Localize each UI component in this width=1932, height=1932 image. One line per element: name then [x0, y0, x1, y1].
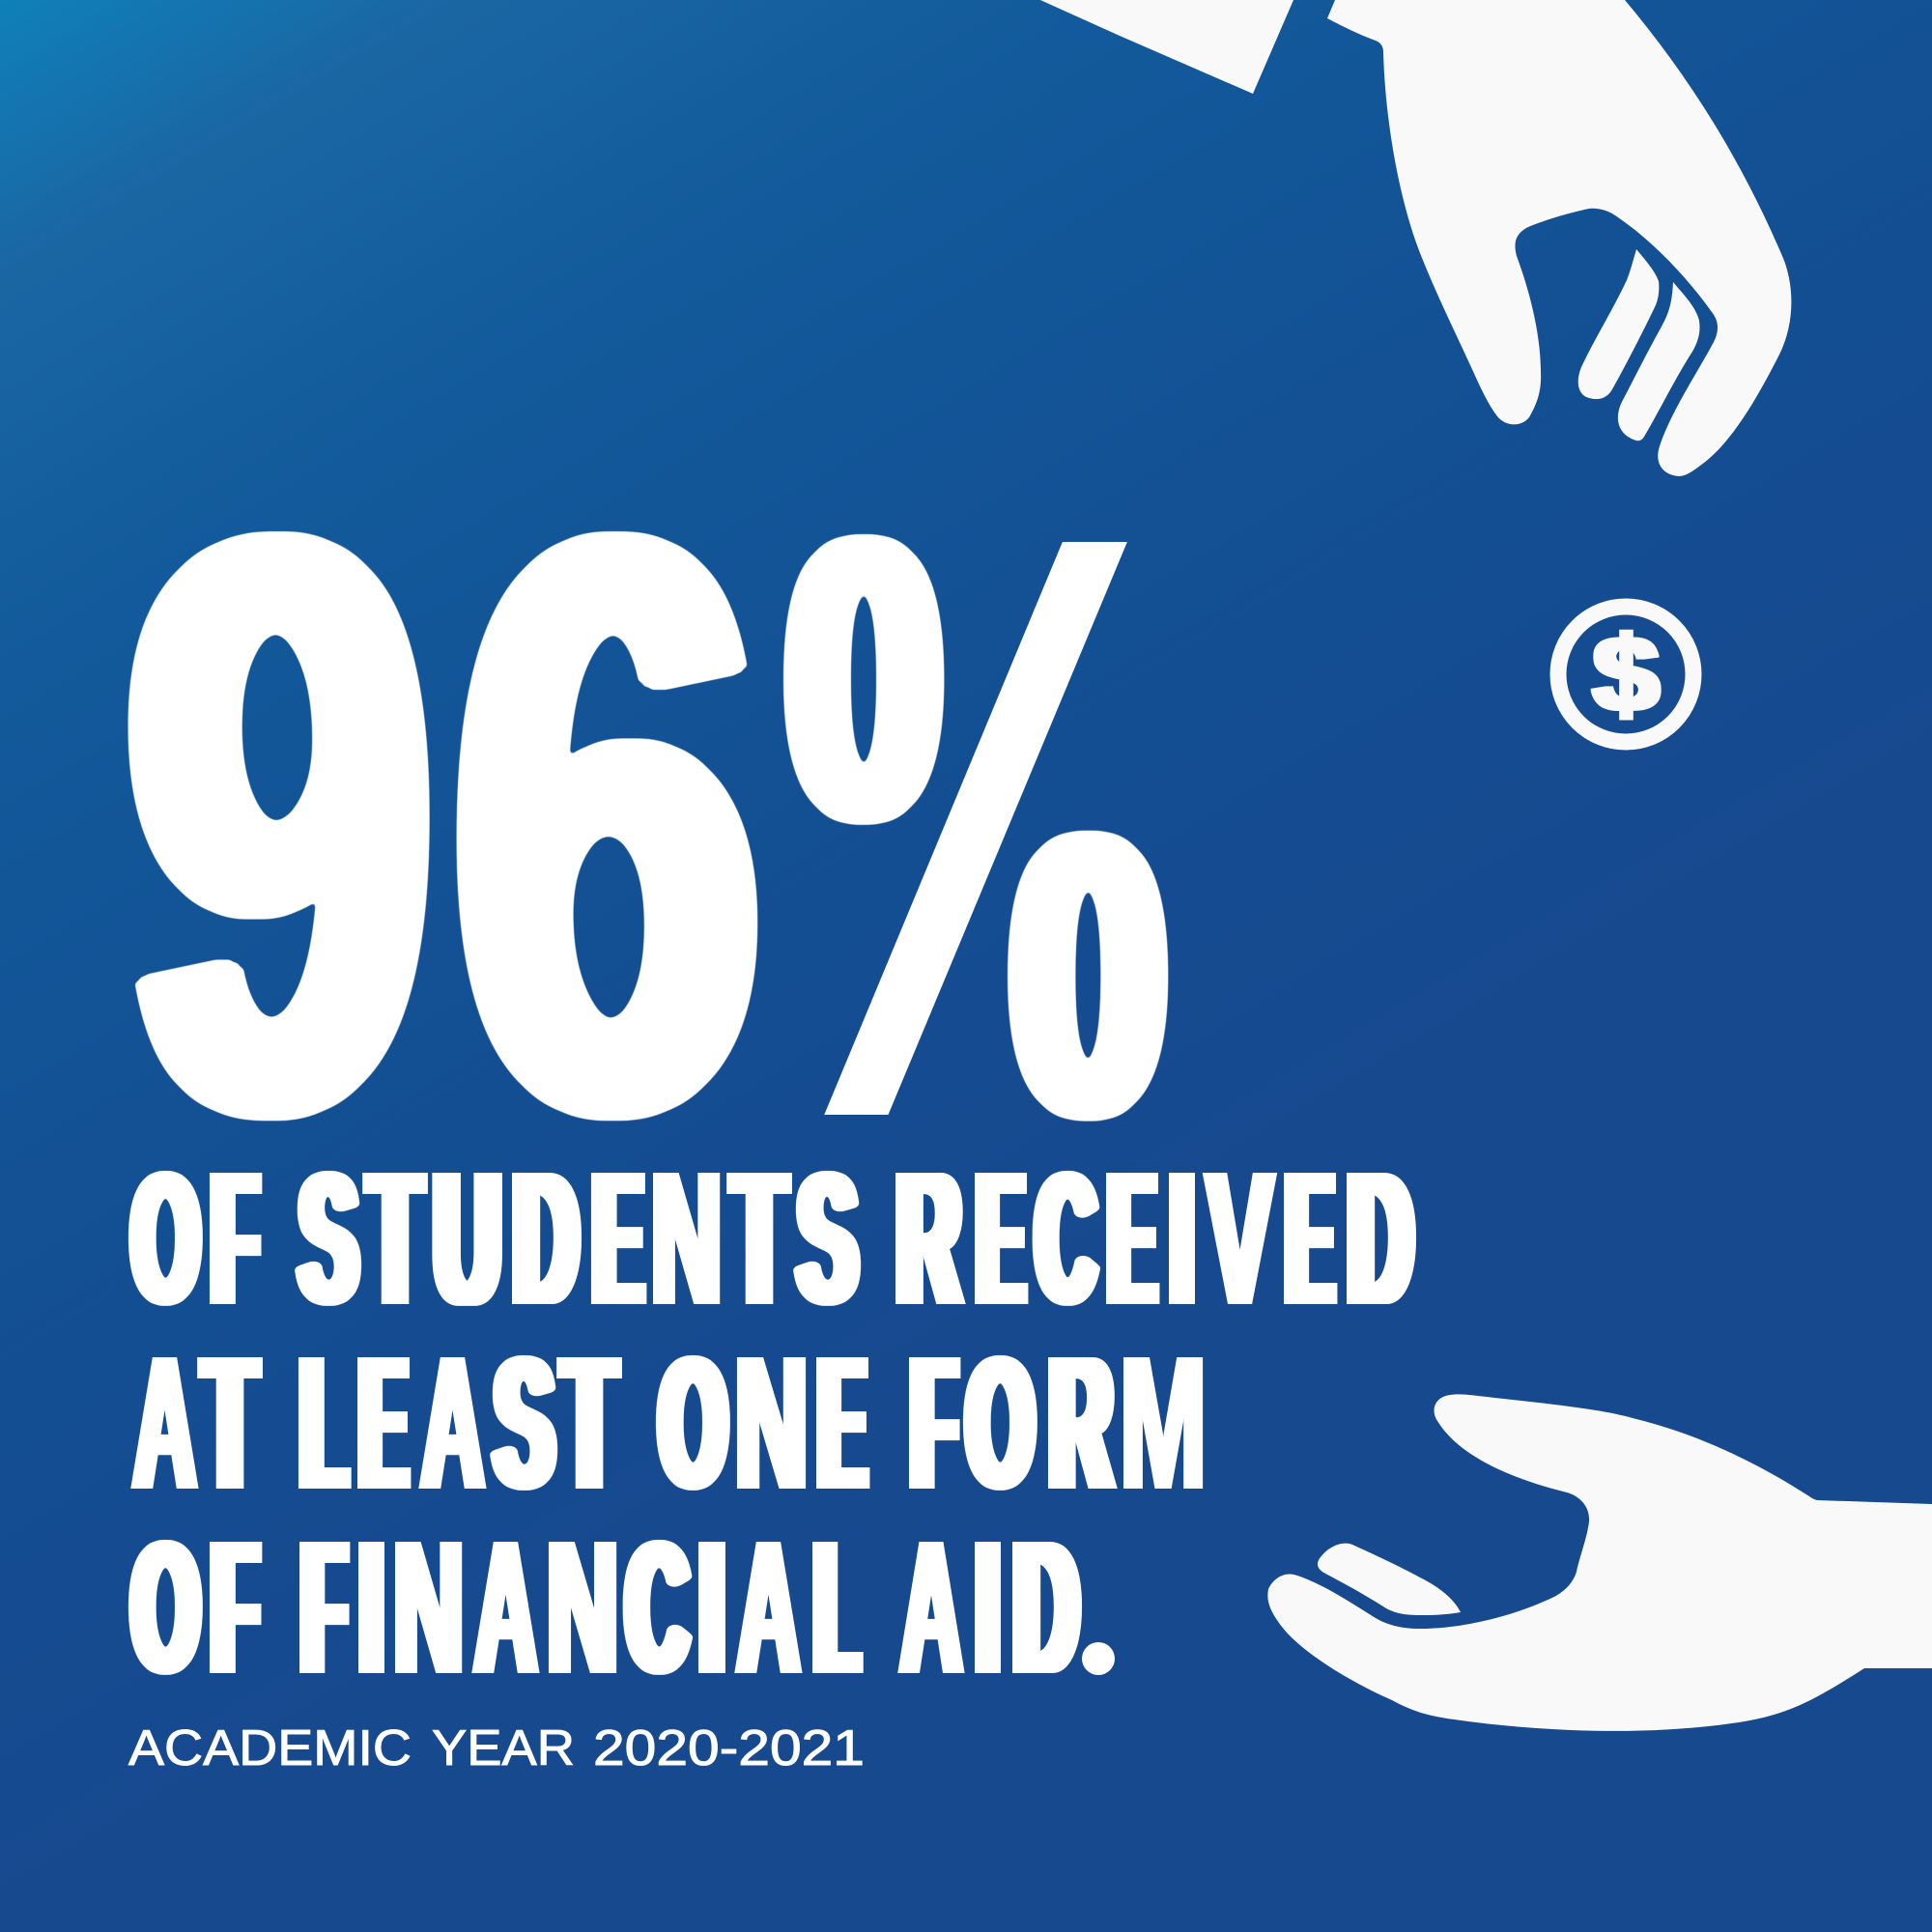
headline line 1: E: [978, 1133, 1023, 1346]
headline line 2: E: [360, 1318, 406, 1530]
headline line 3: O: [132, 1507, 199, 1710]
headline line 1: R: [897, 1131, 960, 1346]
headline line 2: T: [204, 1318, 256, 1530]
headline period: .: [1092, 1581, 1119, 1690]
headline line 2: T: [563, 1318, 615, 1530]
headline line 2: S: [495, 1321, 554, 1525]
headline line 1: D: [514, 1132, 578, 1345]
headline line 1: E: [1287, 1133, 1332, 1346]
headline line 1: V: [1207, 1132, 1273, 1346]
headline line 1: S: [798, 1137, 857, 1341]
headline line 1: D: [1349, 1132, 1412, 1345]
big statistic: percent sign: %: [740, 362, 1211, 1293]
headline line 3: I: [361, 1500, 382, 1714]
big statistic: percent sign: %: [821, 532, 1165, 1248]
headline line 1: T: [733, 1133, 785, 1346]
headline line 3: D: [1014, 1501, 1078, 1714]
headline line 2: N: [735, 1317, 808, 1530]
headline line 2: M: [1120, 1317, 1207, 1529]
headline line 3: C: [627, 1506, 688, 1710]
headline line 2: A: [133, 1316, 196, 1529]
big statistic: 96: [128, 373, 758, 1278]
headline line 3: A: [737, 1500, 800, 1714]
headline line 3: F: [213, 1499, 257, 1714]
big statistic: 96: 9: [128, 373, 431, 1278]
headline line 2: R: [1050, 1317, 1112, 1530]
headline line 3: [132, 1499, 1078, 1715]
headline line 3: L: [815, 1499, 858, 1715]
icon: lower open hand: [1267, 1394, 1932, 1731]
caption: academic year: ACADEMIC: [128, 1720, 412, 1776]
headline line 1: I: [1172, 1131, 1192, 1345]
headline line 1: N: [651, 1132, 722, 1346]
headline line 1: C: [1037, 1136, 1095, 1340]
caption: academic year: 2020-2021: [593, 1720, 865, 1776]
big statistic: 96: 6: [456, 373, 758, 1278]
headline line 1: T: [369, 1133, 421, 1346]
icon: upper hand dropping a coin: [1327, 0, 1791, 476]
headline line 2: E: [819, 1318, 865, 1530]
headline line 1: O: [132, 1138, 199, 1341]
icon: sleeve cuff of upper hand: [1040, 0, 1293, 94]
headline line 3: I: [978, 1500, 998, 1714]
headline line 1: S: [299, 1137, 357, 1341]
headline line 2: L: [301, 1317, 346, 1529]
headline line 1: [132, 1130, 1412, 1346]
headline line 3: I: [700, 1502, 724, 1715]
big statistic: percent sign: %: [787, 406, 1131, 1122]
icon: dollar coin: [1558, 607, 1693, 742]
headline line 1: U: [435, 1131, 500, 1345]
headline line 3: N: [393, 1501, 464, 1715]
headline line 3: A: [474, 1500, 537, 1714]
headline line 2: [133, 1316, 1207, 1530]
caption: academic year: [128, 1720, 865, 1776]
headline line 3: A: [900, 1501, 962, 1715]
headline line 1: F: [213, 1130, 257, 1345]
headline line 2: A: [421, 1316, 484, 1529]
icon: dollar coin: $: [1593, 613, 1659, 734]
headline line 2: F: [912, 1316, 955, 1529]
headline line 2: O: [660, 1322, 726, 1525]
headline line 1: E: [594, 1131, 641, 1345]
headline line 2: O: [967, 1322, 1034, 1525]
headline line 3: F: [302, 1500, 345, 1715]
headline line 1: E: [1109, 1133, 1154, 1346]
caption: academic year: YEAR: [432, 1720, 575, 1776]
headline line 3: N: [547, 1501, 618, 1715]
